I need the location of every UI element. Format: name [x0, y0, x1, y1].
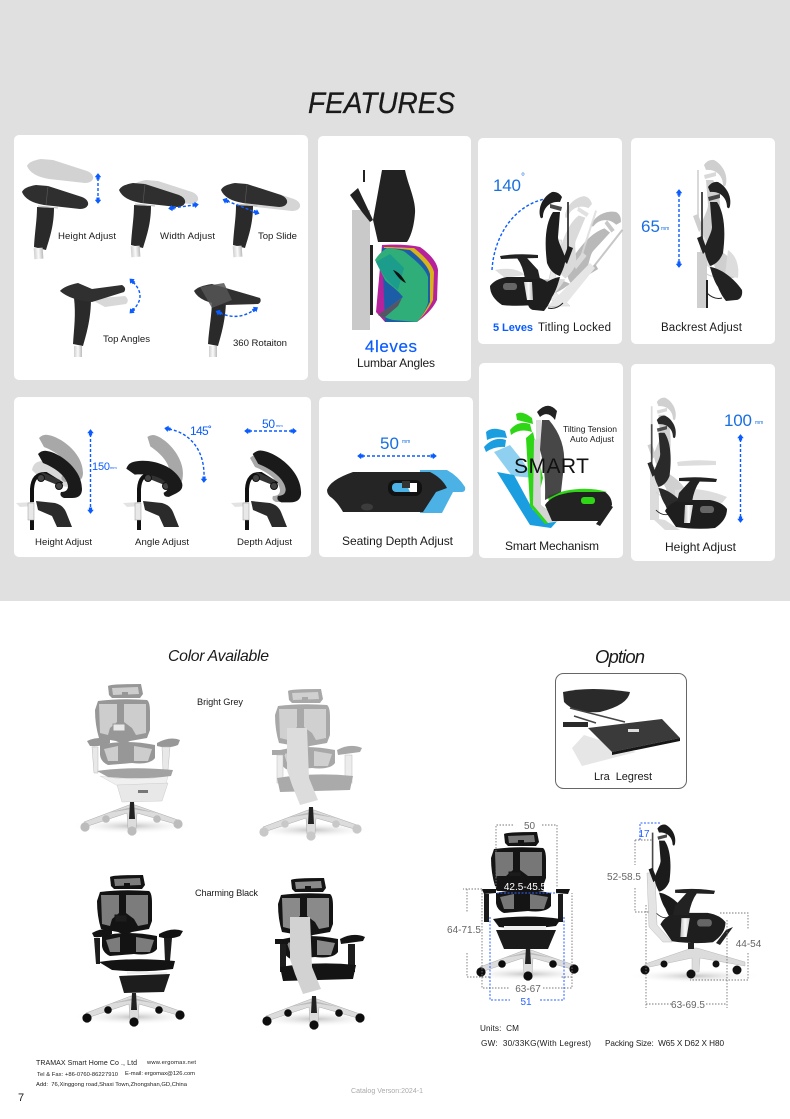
panel: seating depth adjust [319, 397, 473, 557]
callout: 140 degrees: ° [521, 172, 525, 183]
top grey background [0, 0, 790, 601]
icon: smart mechanism chair [484, 406, 613, 528]
chair: black rear [253, 878, 377, 1030]
label: bright grey: Bright Grey [197, 697, 243, 707]
callout: 150 mm: 150 [92, 461, 110, 473]
address: Add: 76,Xinggong road,Shaxi Town,Zhongshan,GD,China [36, 1082, 188, 1088]
spec: gross weight: GW: 30/33KG(With Legrest) [481, 1039, 591, 1048]
label: seating depth adjust: Seating Depth Adjust [342, 534, 454, 548]
spec: units: Units: CM [480, 1024, 519, 1033]
icon: headrest angle [123, 429, 204, 530]
label: 5 levels titling locked: Titling Locked [538, 322, 611, 334]
icon: armrest top slide [221, 183, 300, 257]
heading: option: Option [595, 646, 645, 667]
chair: grey front [70, 684, 194, 836]
label: headrest angle adjust: Angle Adjust [135, 537, 189, 548]
icon: seat depth [327, 456, 465, 513]
label: lumbar angles: Lumbar Angles [357, 356, 435, 370]
spec: packing size: Packing Size: W65 X D62 X H80 [605, 1039, 724, 1048]
diagram: front dimensions [447, 821, 590, 1008]
label: headrest height adjust: Height Adjust [35, 537, 92, 548]
callout: 50 mm: 50 [380, 434, 399, 453]
specs [480, 1024, 724, 1048]
icon: armrest top angles [60, 282, 140, 357]
icon: armrest width adjust [119, 180, 198, 257]
label: legrest: Lra Legrest [594, 771, 652, 783]
callout: 4 levels: 4leves [365, 337, 417, 356]
callout: 100 mm: mm [755, 420, 763, 426]
dim: 50: 50 [524, 821, 535, 832]
icon: backrest height [679, 160, 742, 308]
label: headrest depth adjust: Depth Adjust [237, 537, 292, 548]
callout: 145 degrees: 145˚ [190, 424, 212, 438]
panel: tilting locked [478, 138, 633, 344]
dim: 51: 51 [520, 997, 532, 1008]
telephone: Tel & Fax: +86-0760-86227910 [37, 1072, 118, 1078]
icon: chair height [647, 398, 740, 530]
panel: armrest adjustments [14, 135, 308, 380]
label: backrest adjust: Backrest Adjust [661, 322, 743, 334]
title: FEATURES [308, 87, 455, 120]
panel: height adjust [631, 364, 775, 561]
icon: headrest depth [231, 431, 301, 530]
dim: 44-54: 44-54 [736, 939, 762, 950]
label: 5 levels titling locked: 5 Leves [493, 322, 533, 334]
panel: headrest adjustments [14, 397, 311, 557]
dim: 63-67: 63-67 [515, 984, 541, 995]
label: 5 levels titling locked [493, 322, 611, 334]
label: charming black: Charming Black [195, 888, 258, 898]
big word: SMART: SMART [514, 455, 589, 478]
callout: 100 mm: 100 [724, 411, 752, 430]
panel: backrest adjust [631, 138, 775, 344]
label: auto adjust: Auto Adjust [570, 434, 615, 444]
label: smart mechanism: Smart Mechanism [505, 539, 599, 553]
chair: grey rear [250, 689, 374, 841]
page number: 7 [18, 1092, 24, 1104]
panel: lumbar angles [318, 136, 471, 381]
dim: 42.5-45.5: 42.5-45.5 [504, 882, 547, 893]
label: top angles: Top Angles [103, 334, 150, 345]
callout: 50 mm: mm [402, 439, 410, 445]
callout: 65 mm [641, 217, 669, 236]
label: height adjust: Height Adjust [58, 231, 116, 242]
icon: legrest [563, 689, 680, 766]
dim: 64-71.5: 64-71.5 [447, 925, 481, 936]
label: width adjust: Width Adjust [160, 231, 215, 242]
dim: 17: 17 [638, 829, 650, 840]
footer: company info [36, 1060, 196, 1088]
website: www.ergomax.net [146, 1060, 196, 1066]
icon: armrest 360 rotation [194, 283, 261, 357]
callout: 140 degrees: 140 [493, 176, 521, 195]
label: 360 rotation: 360 Rotaiton [233, 338, 287, 349]
diagram: side dimensions [607, 823, 763, 1011]
heading: color available: Color Available [168, 648, 269, 665]
chair: black front [72, 875, 196, 1027]
dim: 63-69.5: 63-69.5 [671, 1000, 705, 1011]
callout: 50 mm [380, 434, 410, 453]
label: top slide: Top Slide [258, 231, 297, 242]
chair: dimension front [466, 832, 590, 981]
icon: reclining chair [490, 189, 633, 319]
callout: 65 mm: mm [661, 226, 669, 232]
callout: 150 mm: mm [110, 465, 117, 470]
icon: rainbow lumbar [350, 170, 438, 330]
catalog version: Catalog Verson:2024-1 [351, 1088, 423, 1095]
callout: 65 mm: 65 [641, 217, 660, 236]
label: tilting tension: Tilting Tension [563, 424, 617, 434]
callout: 50 mm [262, 417, 283, 431]
callout: 50 mm: mm [276, 423, 283, 428]
icon: headrest height [16, 434, 90, 530]
callout: 50 mm: 50 [262, 417, 275, 431]
icon: armrest height adjust [22, 159, 98, 259]
company name: TRAMAX Smart Home Co ., Ltd [36, 1060, 137, 1067]
panel: smart mechanism [479, 363, 623, 558]
label: height adjust: Height Adjust [665, 540, 737, 554]
chair: dimension side [627, 824, 763, 983]
panel: legrest option [556, 674, 686, 788]
dim: 52-58.5: 52-58.5 [607, 872, 641, 883]
email: E-mail: ergomax@126.com [125, 1071, 195, 1077]
